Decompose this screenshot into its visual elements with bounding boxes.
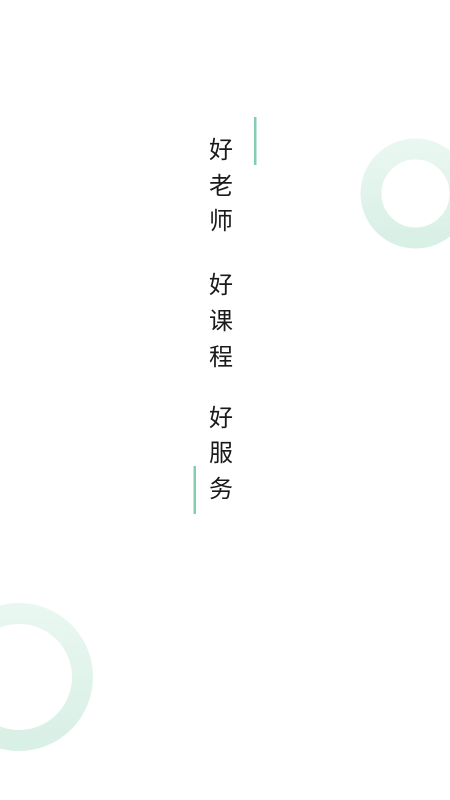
text block: good teachers (209, 137, 233, 235)
accent bar: bottom (194, 466, 196, 514)
text block: good service: 好 (209, 405, 233, 432)
text block: good courses: 程 (209, 344, 233, 371)
text block: good service: 服 (209, 440, 233, 467)
decorative ring: bottom left (0, 614, 82, 740)
decorative ring: top right (371, 149, 450, 238)
text block: good courses: 好 (209, 272, 233, 299)
text block: good teachers: 老 (209, 173, 233, 200)
accent bar: top (254, 117, 256, 165)
text block: good service: 务 (209, 476, 233, 503)
text block: good teachers: 师 (209, 208, 233, 235)
text block: good courses: 课 (209, 308, 233, 335)
text block: good teachers: 好 (209, 137, 233, 164)
text block: good courses (209, 272, 233, 371)
text block: good service (209, 405, 233, 503)
